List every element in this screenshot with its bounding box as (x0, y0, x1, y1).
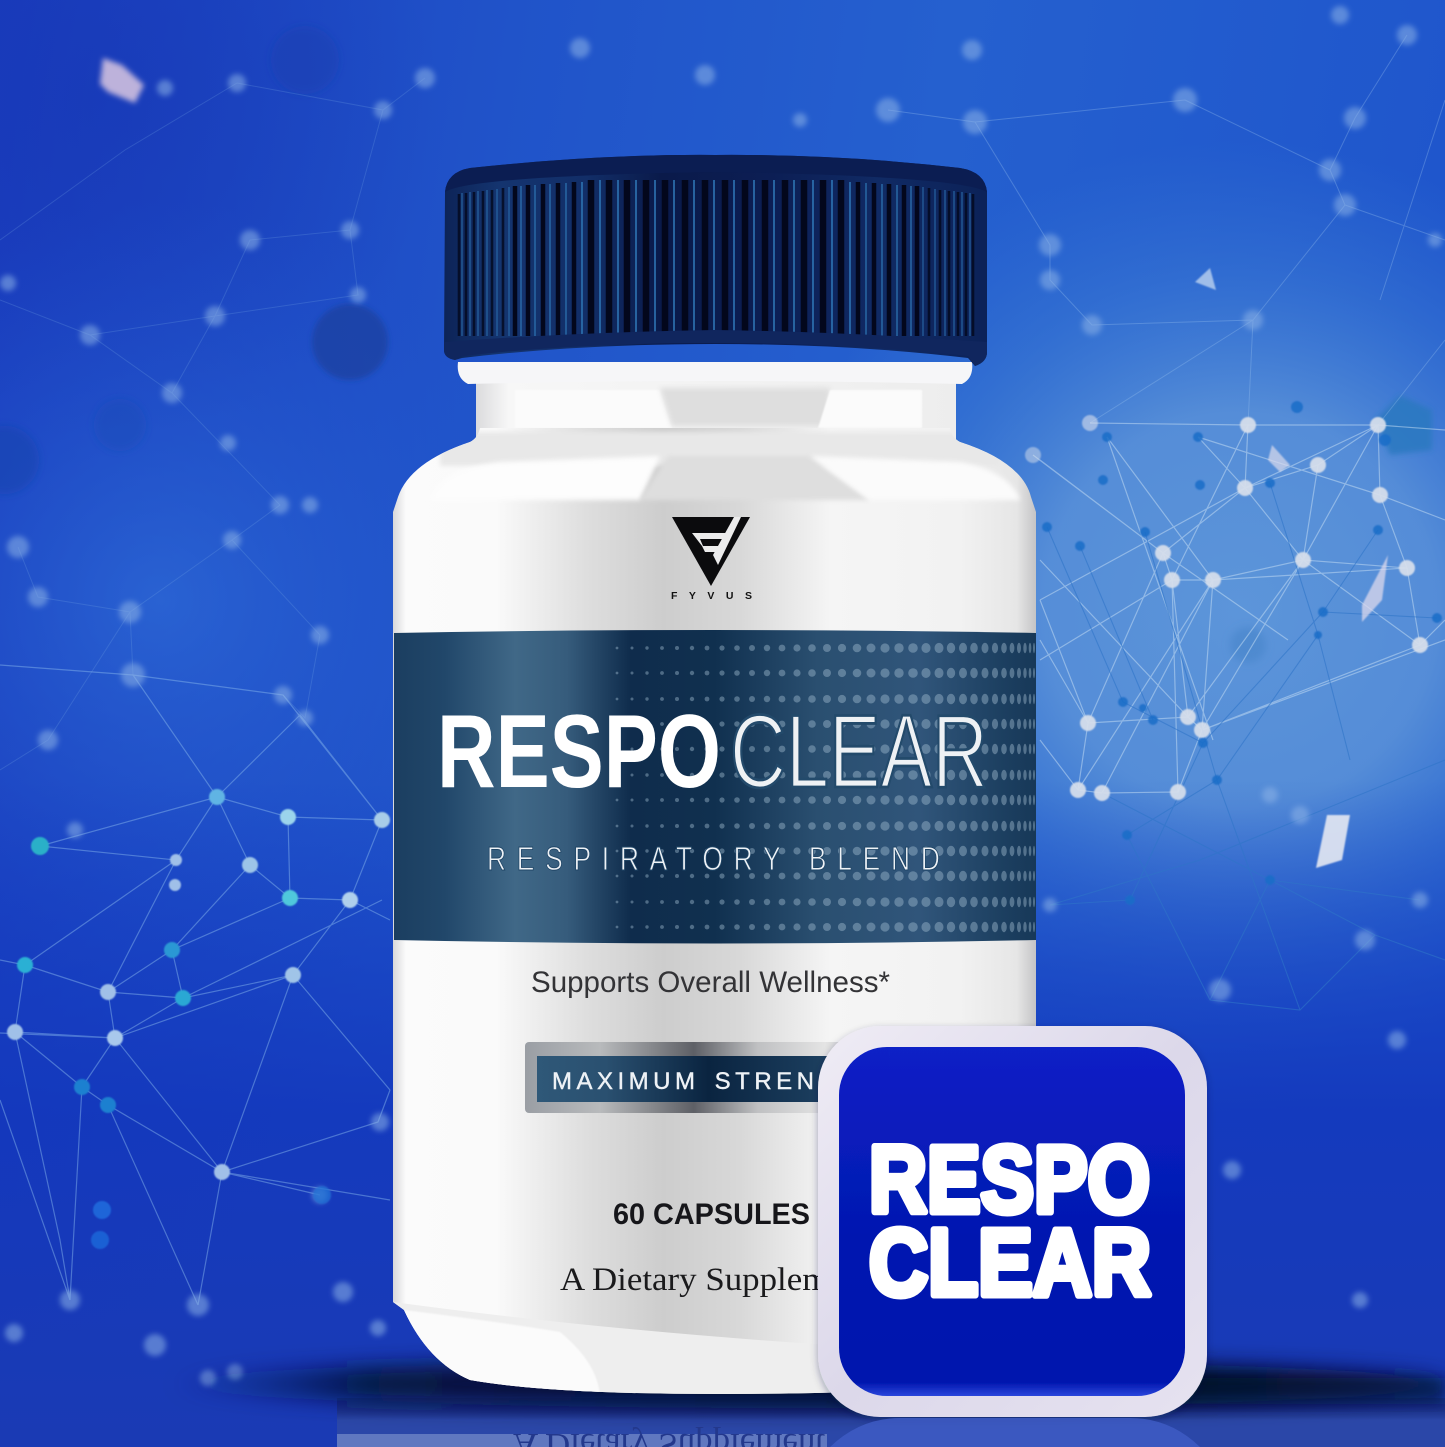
network lines: right cluster deep blue (1047, 483, 1445, 1010)
product name (437, 694, 988, 810)
badge panel (839, 1047, 1185, 1396)
label band (394, 630, 1036, 944)
badge (818, 1026, 1207, 1417)
product name: CLEAR (730, 694, 988, 810)
light shards (100, 58, 1388, 868)
cap ridges: dark grooves (459, 180, 973, 336)
strength pill: MAXIMUM STRENGTH (552, 1068, 883, 1095)
dietary supplement line: A Dietary Supplement (560, 1262, 872, 1298)
badge reflection (830, 1418, 1200, 1447)
bottle body with shoulder (390, 425, 1040, 1400)
bottle base rim (393, 1302, 830, 1400)
cap ridges: blue highlights (462, 180, 970, 336)
brand logo: FYVUS (671, 590, 752, 602)
product name: RESPO (437, 694, 721, 810)
network lines: upper left faint (0, 78, 425, 770)
network nodes: left teal dots (7, 789, 390, 1249)
strength pill (525, 1042, 900, 1113)
floor: dark reflective surface (170, 1360, 1445, 1447)
capsule count: 60 CAPSULES (613, 1198, 810, 1231)
cap (444, 155, 987, 366)
subtitle: RESPIRATORY BLEND (487, 841, 940, 878)
bottle (390, 155, 1040, 1400)
network nodes: right blue dots (1042, 401, 1442, 905)
claim text: Supports Overall Wellness* (531, 966, 890, 999)
network nodes: right pale dots (1025, 415, 1428, 801)
bottle neck (458, 362, 972, 445)
badge title: RESPO (869, 1127, 1150, 1233)
network lines: left lower cluster (0, 665, 390, 1305)
brand logo (671, 517, 752, 602)
badge title (869, 1127, 1151, 1316)
badge title: CLEAR (869, 1210, 1151, 1316)
network lines: right cluster web (1033, 423, 1445, 793)
halftone dots (616, 643, 1035, 932)
network lines: upper right (888, 35, 1445, 425)
badge frame (818, 1026, 1207, 1417)
